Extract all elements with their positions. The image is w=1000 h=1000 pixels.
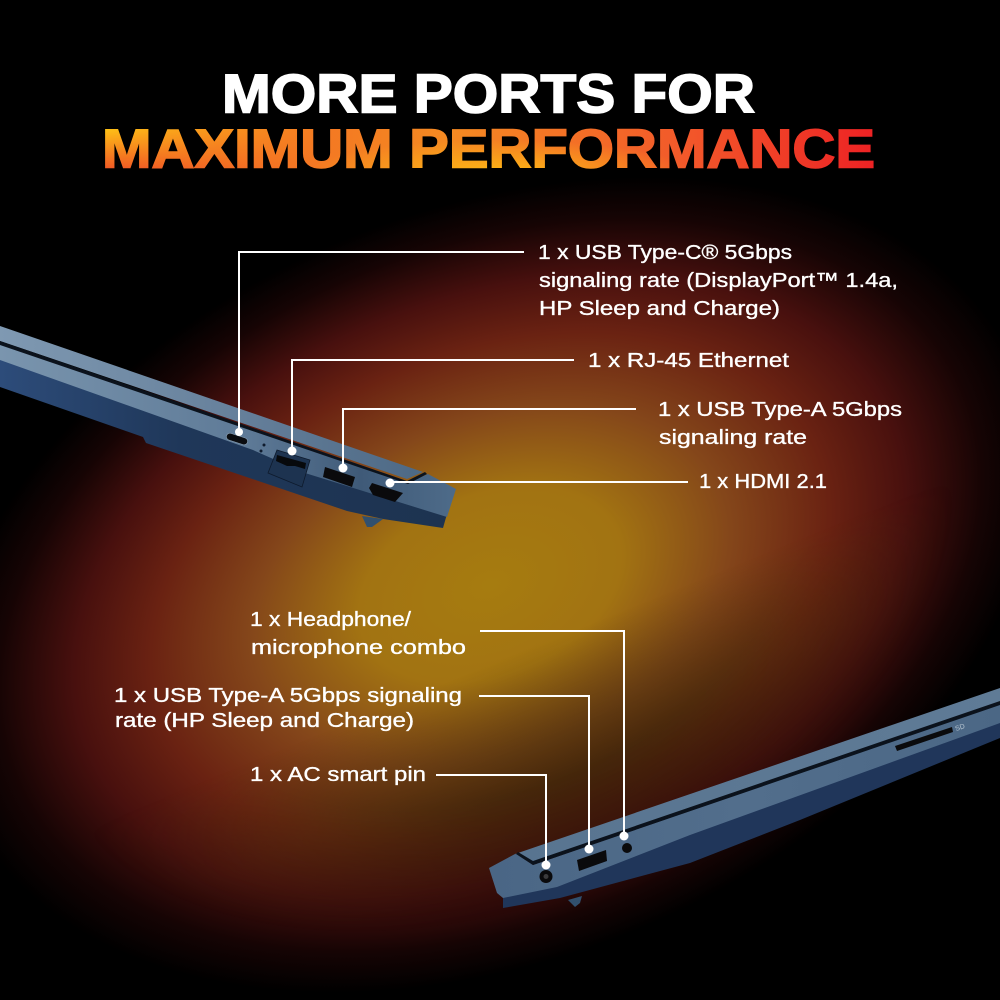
connector: USB-A left side (479, 696, 594, 854)
SD label: SD (954, 723, 966, 733)
label: USB Type-A left side: 1 x USB Type-A 5Gbps signaling (114, 684, 462, 707)
title line 2: MAXIMUM PERFORMANCE (102, 118, 875, 180)
black seam (516, 701, 1000, 865)
label: USB Type-C: signaling rate (DisplayPort™ 1.4a, (539, 269, 898, 292)
body light band (0, 344, 456, 517)
port: headphone jack (622, 843, 632, 853)
port: AC smart pin (540, 870, 552, 883)
title (102, 62, 875, 180)
title line 1: MORE PORTS FOR (222, 62, 755, 124)
label: USB Type-A right side: signaling rate (659, 426, 807, 449)
label: USB Type-C (538, 241, 898, 320)
body dark base (503, 720, 1000, 908)
port: RJ-45 (268, 450, 310, 487)
background glow (0, 192, 1000, 978)
port: USB-A (323, 467, 355, 487)
foot (568, 896, 582, 907)
label: USB Type-C: 1 x USB Type-C® 5Gbps (538, 241, 792, 264)
label: USB Type-A left side (114, 684, 462, 732)
foot (362, 516, 383, 527)
label: AC smart pin: 1 x AC smart pin (250, 763, 426, 786)
label: USB Type-A right side (658, 398, 902, 449)
label: HDMI: 1 x HDMI 2.1 (699, 470, 827, 493)
connector: AC smart pin (436, 775, 550, 870)
port: HDMI (369, 483, 403, 502)
laptop body dark base (0, 358, 447, 528)
port: USB-C (225, 432, 249, 446)
laptop: upper left side view (0, 326, 456, 528)
laptop: lower right side view (489, 688, 1000, 908)
lid band (515, 688, 1000, 862)
port: USB-A (577, 850, 607, 871)
connector: RJ-45 (288, 360, 574, 456)
label: headphone (250, 608, 466, 659)
label: RJ-45: 1 x RJ-45 Ethernet (588, 349, 789, 372)
connector: HDMI (386, 478, 688, 488)
label: USB Type-A left side: rate (HP Sleep and Charge) (115, 709, 414, 732)
lid band (0, 326, 423, 479)
body light band (489, 704, 1000, 898)
port: SD card slot (895, 727, 953, 751)
black seam (0, 341, 427, 484)
connector: USB-A right side (338, 409, 636, 472)
label: USB Type-A right side: 1 x USB Type-A 5Gbps (658, 398, 902, 421)
connector: headphone (480, 631, 628, 840)
label: headphone: 1 x Headphone/ (250, 608, 411, 631)
label: USB Type-C: HP Sleep and Charge) (539, 297, 780, 320)
label: headphone: microphone combo (251, 636, 466, 659)
indicator lights (260, 444, 266, 452)
connector: USB-C (235, 252, 524, 436)
